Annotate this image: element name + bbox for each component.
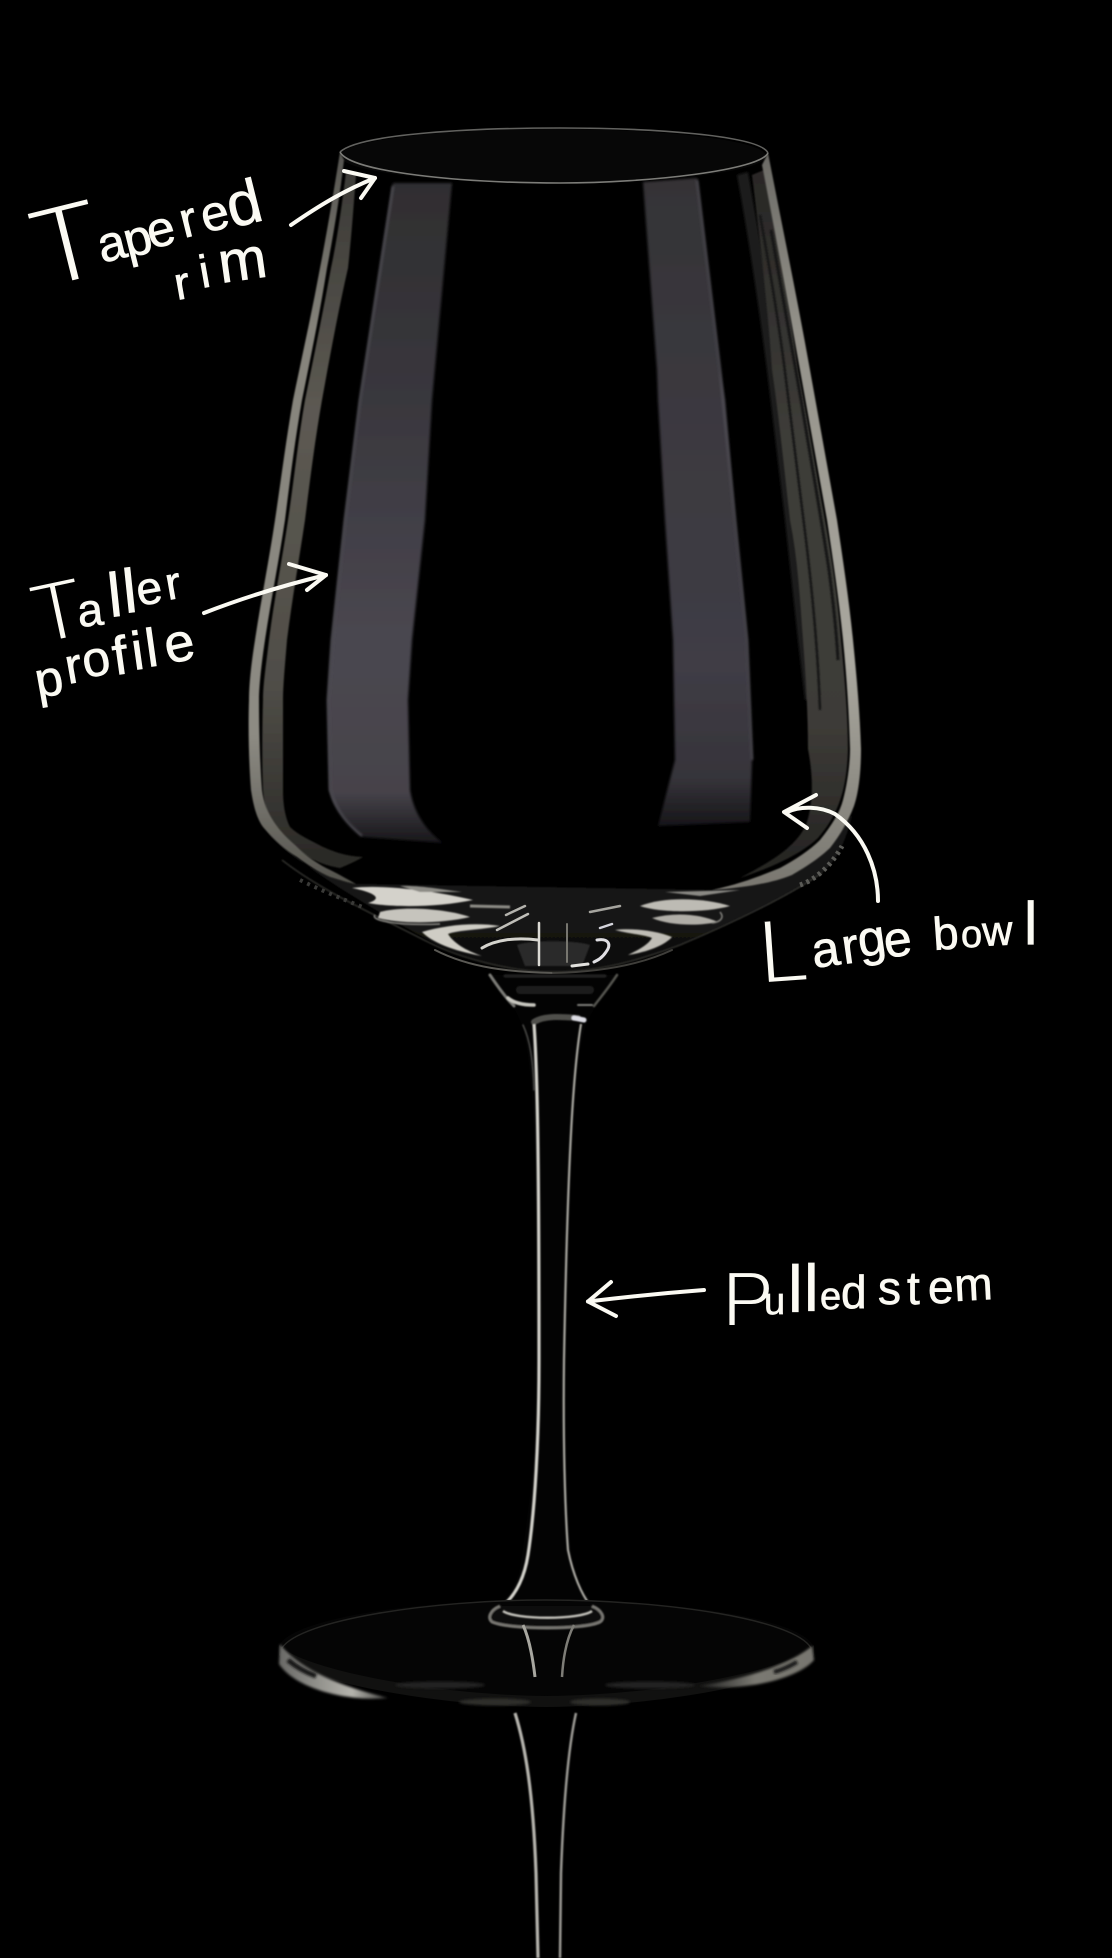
text: profile: fil <box>108 618 162 687</box>
right wall faint inner band <box>737 172 820 700</box>
base reflection: left cluster <box>352 886 510 924</box>
text: Large bowl: w <box>980 906 1014 955</box>
right wall outer bright band <box>712 153 861 890</box>
text: Tapered: d <box>219 166 269 242</box>
text: rim: ri <box>170 245 214 310</box>
arrow: to bowl <box>784 795 878 901</box>
label: Pulled stem <box>588 1251 994 1343</box>
punt: right crescent <box>615 929 672 955</box>
text: Tapered: T <box>17 173 116 314</box>
text: Large bowl: l <box>1024 890 1037 957</box>
text: profile: pro <box>30 629 114 709</box>
stem refraction through foot <box>523 1625 535 1677</box>
text: Pulled stem: stem <box>868 1257 994 1316</box>
reflection: left vertical light panel <box>328 183 452 843</box>
punt: center vertical highlights <box>539 923 588 966</box>
stem left highlight <box>504 1024 539 1605</box>
text: Pulled stem: ll <box>788 1251 819 1326</box>
arrow: to rim <box>291 171 375 225</box>
text: Pulled stem: d <box>841 1266 867 1318</box>
text: Taller: T <box>22 559 93 664</box>
punt: inner arcs <box>435 939 672 973</box>
collar edges <box>490 975 617 1090</box>
rim ellipse <box>340 128 768 183</box>
right panel lit edge <box>697 180 752 760</box>
text: profile: e <box>158 611 200 676</box>
left panel lit edge <box>328 186 393 836</box>
base reflection: small center flecks <box>497 906 620 930</box>
left wall inner band <box>262 172 363 868</box>
text: rim: m <box>214 225 271 296</box>
punt: central glass cone <box>517 941 590 966</box>
reflection: right vertical light panel <box>643 178 752 826</box>
stem body <box>489 975 617 1615</box>
stem reflection below foot <box>515 1713 576 1958</box>
glass bowl <box>249 128 861 973</box>
foot left edge highlight <box>279 1644 388 1699</box>
text: Large bowl: b <box>917 906 960 960</box>
base reflection: right cluster <box>640 890 740 925</box>
label: Large bowl <box>754 795 1037 1004</box>
text: Pulled stem: u <box>764 1281 785 1323</box>
text: Taller: a <box>75 583 106 637</box>
text: Pulled stem: e <box>820 1276 841 1318</box>
ribbed edge lower right <box>800 846 842 885</box>
rim interior shade <box>340 129 766 183</box>
foot right edge highlight <box>698 1646 814 1687</box>
text: Large bowl: arge <box>808 909 915 979</box>
left wall outer bright band <box>249 152 356 884</box>
base ring inner highlight <box>503 1611 592 1618</box>
right wall band dark stripes <box>760 215 838 710</box>
label: Tapered rim <box>17 166 375 314</box>
text: Pulled stem: P <box>722 1255 774 1343</box>
foot <box>278 1600 814 1707</box>
foot left edge dark notch <box>288 1660 316 1676</box>
text: Taller: er <box>132 556 185 616</box>
wine glass <box>249 128 861 1958</box>
text: Taller: ll <box>104 557 140 631</box>
text: Tapered: apere <box>91 183 235 274</box>
foot top rim <box>282 1600 811 1648</box>
stem <box>489 975 617 1615</box>
foot center reflections <box>395 1682 695 1706</box>
arrow: to stem <box>588 1282 704 1316</box>
foot bottom edge <box>279 1645 814 1707</box>
stem right highlight <box>564 1024 590 1605</box>
text: Large bowl: o <box>961 914 982 956</box>
text: Large bowl: L <box>754 899 812 1004</box>
foot right edge dark notch <box>774 1662 797 1672</box>
right wall inner band <box>740 170 848 878</box>
ribbed edge lower left <box>300 880 365 908</box>
arrow: to profile <box>204 564 326 613</box>
punt: left crescent <box>422 924 500 956</box>
foot disc <box>278 1600 814 1700</box>
foot stem base ring <box>490 1606 603 1628</box>
label: Taller profile <box>22 556 326 709</box>
lower outer contour <box>282 860 822 972</box>
lower glass thickness <box>263 815 852 972</box>
